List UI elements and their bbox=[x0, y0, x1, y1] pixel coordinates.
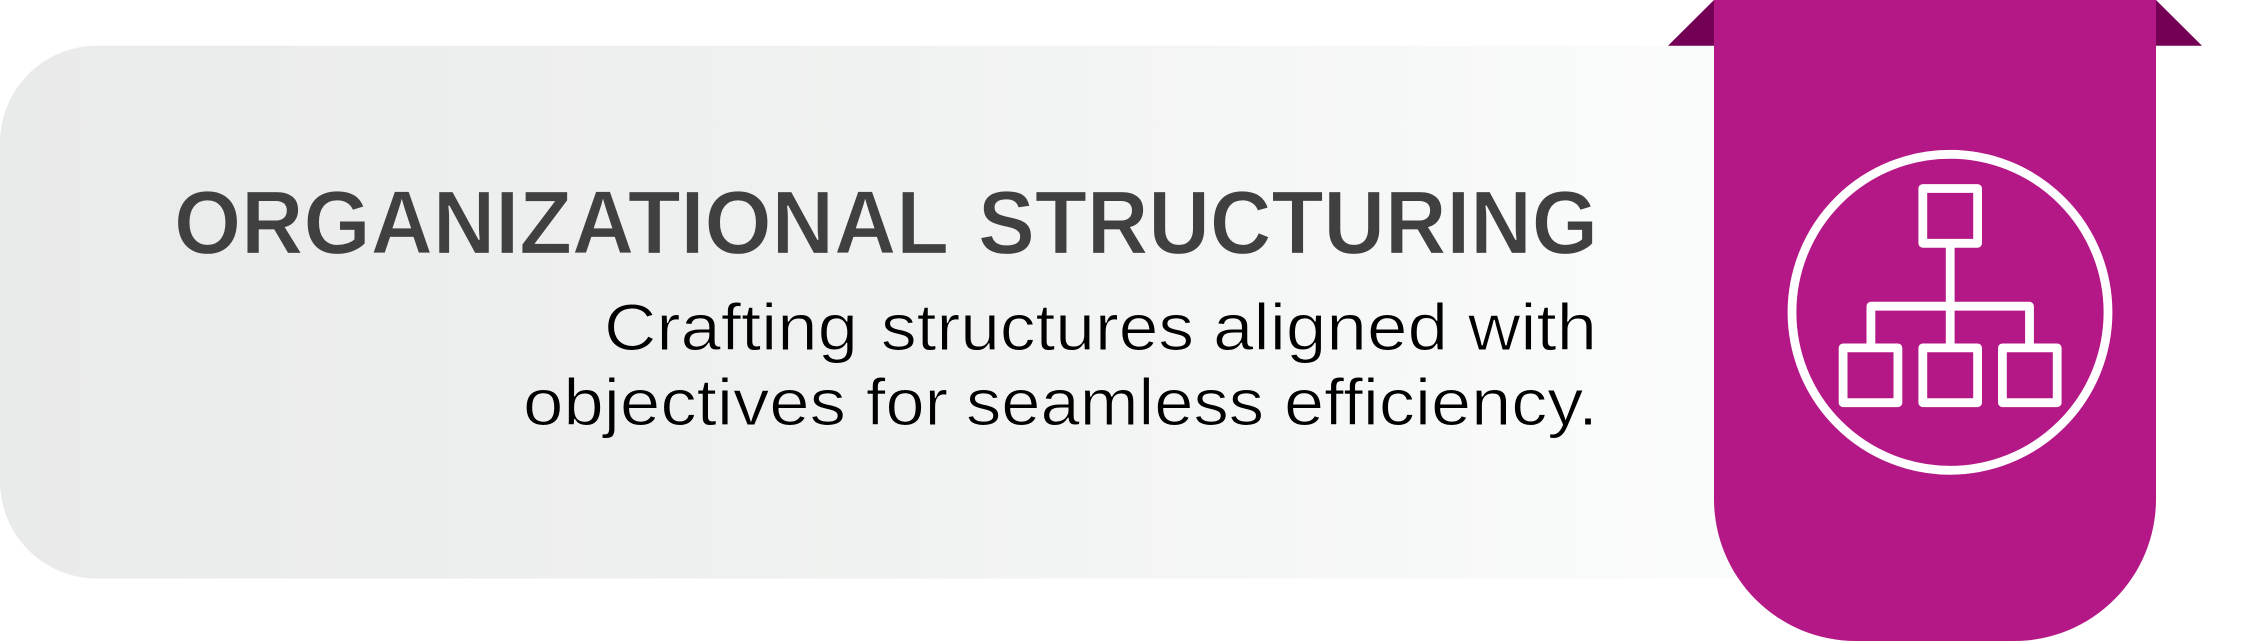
description line 2: seamless bbox=[966, 365, 1264, 439]
description line 2: for bbox=[866, 365, 948, 439]
bottom left box bbox=[1843, 348, 1898, 403]
description text bbox=[523, 290, 1598, 439]
ribbon fold: left bbox=[1668, 0, 1714, 46]
bottom middle box bbox=[1923, 348, 1978, 403]
panel: grey background bbox=[0, 46, 1760, 578]
icon circle bbox=[1792, 154, 2108, 470]
description line 1: aligned bbox=[1213, 290, 1448, 364]
top box bbox=[1923, 188, 1978, 243]
heading: STRUCTURING bbox=[978, 174, 1598, 274]
heading bbox=[174, 174, 1598, 274]
icon: organization chart in circle bbox=[1792, 154, 2108, 470]
description line 1: with bbox=[1467, 290, 1597, 364]
ribbon bbox=[1714, 0, 2156, 641]
description line 1 bbox=[604, 290, 1597, 364]
heading: ORGANIZATIONAL bbox=[174, 174, 949, 274]
description line 1: Crafting bbox=[604, 290, 858, 364]
description line 2: efficiency. bbox=[1284, 365, 1598, 439]
ribbon fold: right bbox=[2156, 0, 2202, 46]
description line 2: objectives bbox=[523, 365, 846, 439]
description line 1: structures bbox=[881, 290, 1194, 364]
bottom right box bbox=[2002, 348, 2057, 403]
connector lines bbox=[1871, 243, 2030, 348]
description line 2 bbox=[523, 365, 1598, 439]
